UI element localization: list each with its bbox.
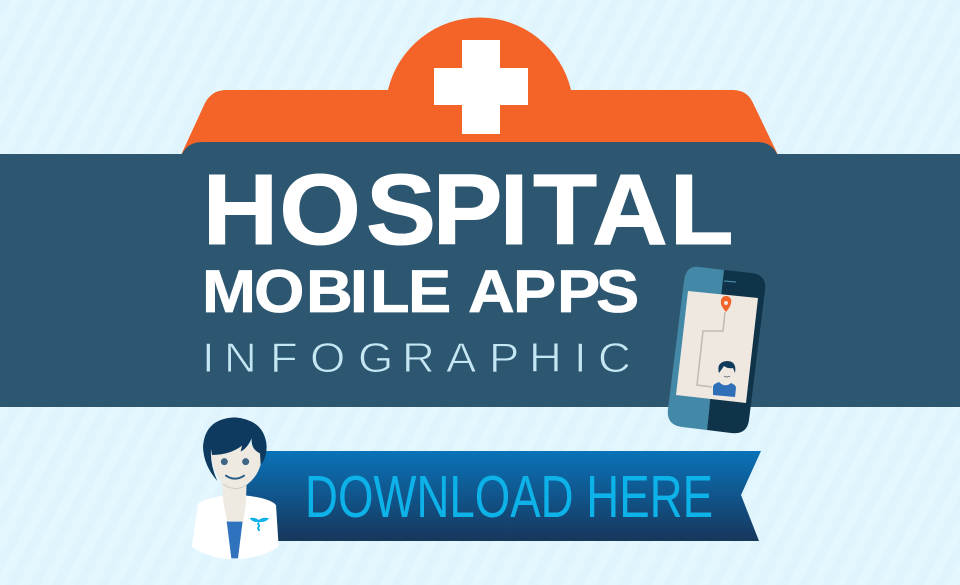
- map pin: [721, 296, 731, 312]
- hospital roof: [181, 18, 778, 155]
- map screen: [676, 291, 758, 403]
- blue shirt: [227, 521, 243, 558]
- icon: phone with map: [668, 267, 765, 433]
- button label: DOWNLOAD HERE: [305, 464, 713, 530]
- ribbon shape: [246, 451, 761, 541]
- chin shadow: [223, 484, 247, 489]
- icon: caduceus: [250, 518, 269, 531]
- person on map: [713, 361, 736, 397]
- face: [210, 444, 261, 488]
- neck: [222, 480, 247, 522]
- subtitle: infographic: INFOGRAPHIC: [202, 335, 631, 382]
- hair: [203, 417, 267, 481]
- doctor character: [192, 417, 279, 559]
- smile: [226, 476, 244, 479]
- phone body: [668, 267, 724, 430]
- download ribbon: [246, 451, 761, 541]
- title band: [0, 142, 960, 407]
- map route: [697, 312, 725, 387]
- icon: medical cross: [434, 40, 528, 134]
- white coat: [192, 496, 279, 559]
- subtitle: mobile apps: MOBILE APPS: [202, 258, 639, 325]
- phone speaker: [724, 281, 736, 282]
- roof shape: [181, 18, 778, 155]
- eyes: [221, 458, 228, 465]
- title: hospital: HOSPITAL: [203, 153, 734, 265]
